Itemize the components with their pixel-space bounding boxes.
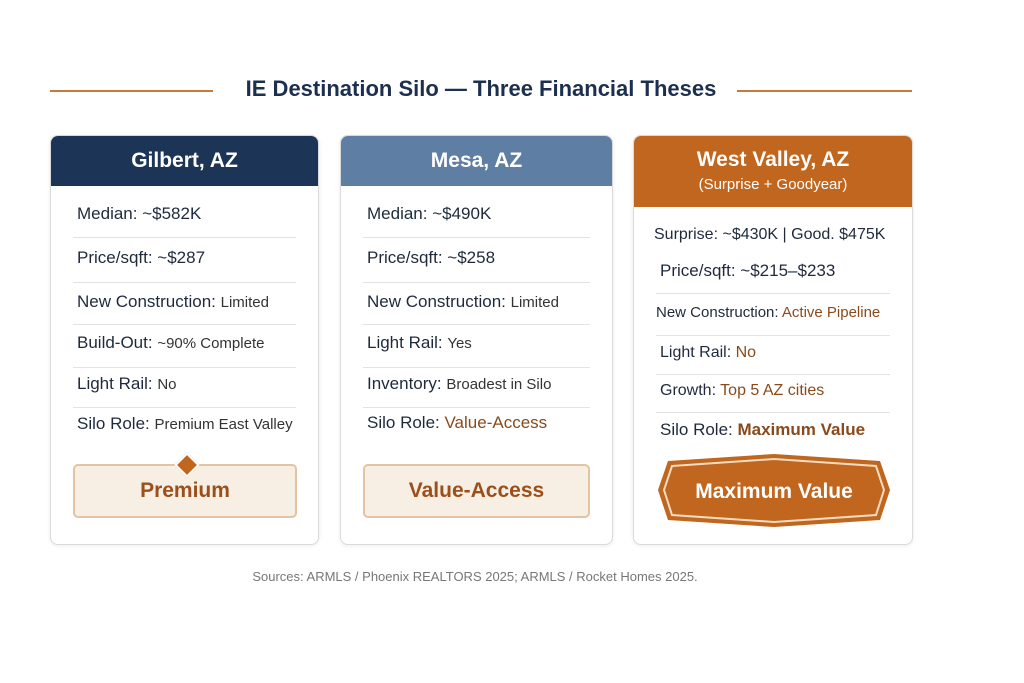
panel: Gilbert <box>50 135 319 545</box>
header: West Valley: (Surprise + Goodyear) <box>699 176 847 193</box>
icon: diamond <box>174 452 200 478</box>
badge: Premium <box>73 464 297 518</box>
header: Gilbert: Gilbert, AZ <box>131 149 238 172</box>
panel: Gilbert: Silo Role: Premium East Valley <box>77 414 293 433</box>
badge: Maximum Value: Maximum Value <box>695 480 853 503</box>
panel: Mesa: Silo Role: Value-Access <box>367 413 547 432</box>
header: West Valley <box>634 136 912 207</box>
title: IE Destination Silo — Three Financial Theses <box>246 76 716 101</box>
panel: West Valley: Surprise: ~$430K | Good. $475K <box>654 226 885 243</box>
panel: Gilbert: Build-Out: ~90% Complete <box>77 333 264 352</box>
header: Mesa: Mesa, AZ <box>431 149 522 172</box>
panel: Mesa: Price/sqft: ~$258 <box>367 248 495 267</box>
badge: Value-Access <box>363 464 590 518</box>
sources: Sources: ARMLS / Phoenix REALTORS 2025; ARMLS / Rocket Homes 2025. <box>252 569 698 584</box>
panel: Mesa: Inventory: Broadest in Silo <box>367 374 551 393</box>
panel: West Valley <box>633 135 913 545</box>
panel: Gilbert: Price/sqft: ~$287 <box>77 248 205 267</box>
panel: Gilbert: Median: ~$582K <box>77 204 201 223</box>
panel: Mesa: New Construction: Limited <box>367 292 559 311</box>
panel: Gilbert: New Construction: Limited <box>77 292 269 311</box>
panel: West Valley: Growth: Top 5 AZ cities <box>660 382 824 399</box>
header: Mesa <box>341 136 612 186</box>
panel: West Valley: Light Rail: No <box>660 344 756 361</box>
header: West Valley: West Valley, AZ <box>697 148 849 171</box>
panel: Mesa: Light Rail: Yes <box>367 333 472 352</box>
panel: West Valley: Silo Role: Maximum Value <box>660 420 865 439</box>
panel: West Valley: Price/sqft: ~$215–$233 <box>660 261 835 280</box>
badge: Maximum Value <box>658 454 890 527</box>
panel: Mesa: Median: ~$490K <box>367 204 491 223</box>
panel: Gilbert: Light Rail: No <box>77 374 177 393</box>
badge: Premium: Premium <box>140 479 230 502</box>
panel: Mesa <box>340 135 613 545</box>
panel: West Valley: New Construction: Active Pipeline <box>656 304 880 321</box>
badge: Value-Access: Value-Access <box>409 479 544 502</box>
header: Gilbert <box>51 136 318 186</box>
